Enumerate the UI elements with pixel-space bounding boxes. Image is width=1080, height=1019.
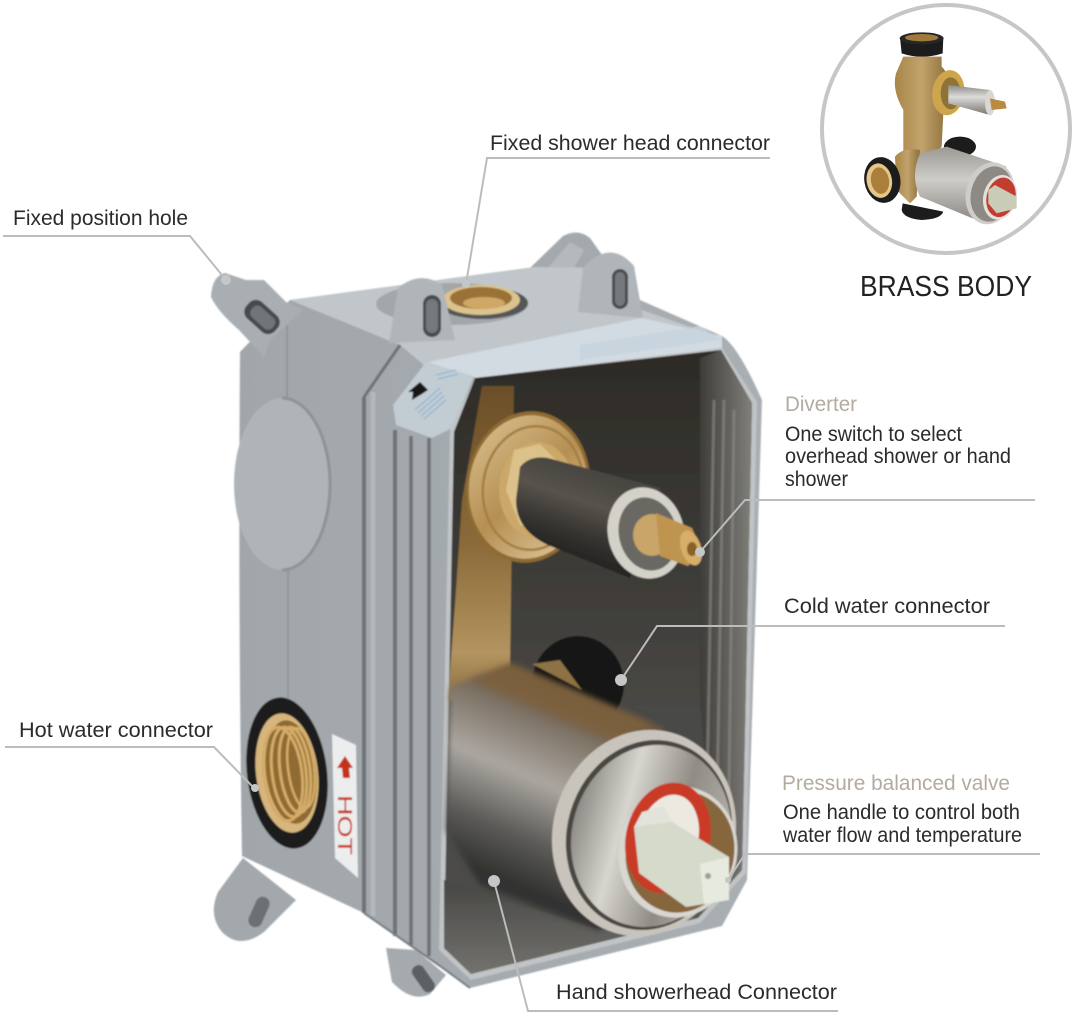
label: hand showerhead connector: Hand showerhead Connector — [556, 981, 837, 1004]
text block: diverter — [785, 393, 1011, 491]
text block: pressure balanced valve — [782, 772, 1022, 847]
text block: pressure balanced valve: Pressure balanced valve — [782, 772, 1010, 795]
left lower lug — [214, 858, 296, 941]
front right lug — [578, 252, 643, 318]
label: hot water connector: Hot water connector — [19, 719, 213, 742]
inset: brass body — [822, 5, 1070, 303]
label: fixed shower head connector: Fixed shower head connector — [490, 132, 770, 155]
label: cold water connector: Cold water connector — [784, 595, 990, 618]
brass fitting on top — [376, 283, 528, 325]
leader: diverter — [695, 500, 1035, 557]
rear black connector — [532, 636, 624, 732]
glossy sticker strip on rim — [393, 318, 722, 438]
label: fixed position hole: Fixed position hole — [13, 207, 188, 230]
text block: pressure balanced valve: One handle to control both — [783, 801, 1020, 824]
text block: pressure balanced valve: water flow and temperature — [782, 824, 1022, 847]
leader: hot water connector — [5, 747, 259, 792]
HOT sticker: HOT — [333, 795, 355, 855]
leader: fixed shower head connector — [462, 158, 770, 288]
interior cavity — [439, 348, 757, 980]
leader: hand showerhead connector — [488, 875, 838, 1011]
text block: diverter: Diverter — [785, 393, 857, 416]
inset valve illustration — [861, 32, 1022, 230]
leader: cold water connector — [615, 626, 1005, 686]
product illustration: valve box — [211, 232, 762, 997]
left upper lug — [211, 273, 303, 357]
text block: diverter: shower — [785, 468, 848, 491]
inset circle — [822, 5, 1070, 253]
side bump cover — [234, 310, 330, 740]
valve head — [528, 708, 760, 958]
leader: pressure balanced valve — [725, 854, 1040, 883]
brass reflection on cylinder — [470, 664, 650, 750]
HOT sticker — [332, 734, 358, 878]
brass body column — [448, 386, 556, 700]
text block: diverter: overhead shower or hand — [785, 445, 1011, 468]
text block: diverter: One switch to select — [785, 423, 962, 446]
right lower lug — [386, 948, 446, 997]
rim ribs — [364, 345, 470, 988]
box body silhouette — [239, 267, 762, 988]
top face — [290, 267, 722, 378]
hot water connector — [238, 693, 336, 853]
leader: fixed position hole — [3, 236, 231, 285]
inset caption: BRASS BODY — [860, 271, 1032, 303]
valve cylinder — [446, 664, 664, 930]
front top lug — [389, 278, 455, 343]
diverter flange and shaft — [456, 403, 706, 587]
rear top lug — [530, 232, 607, 300]
